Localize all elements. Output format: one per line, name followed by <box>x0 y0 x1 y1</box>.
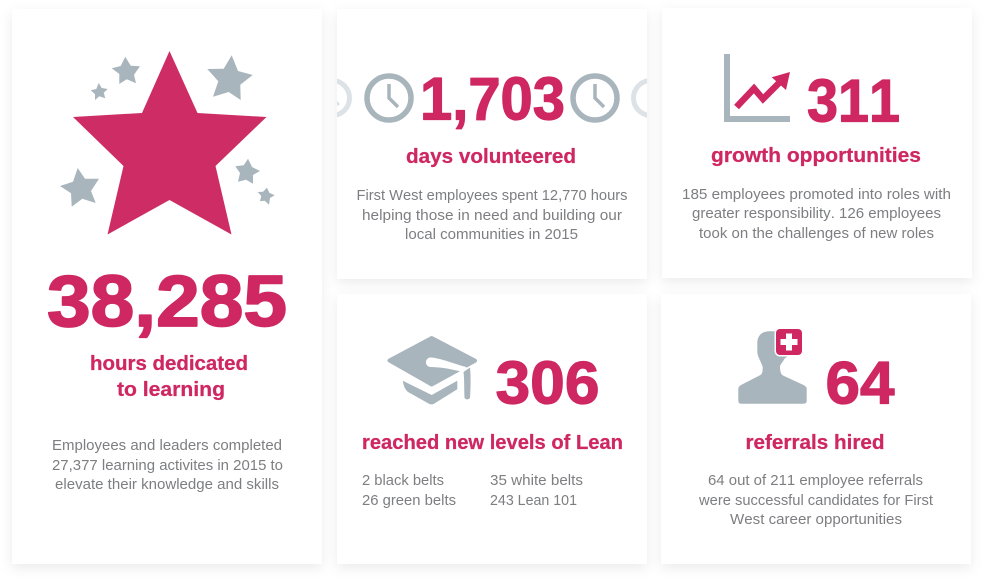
description: Employees and leaders completed <box>52 437 282 454</box>
panel: referrals hired <box>661 294 971 564</box>
big number: 38,285 <box>47 262 287 342</box>
description: elevate their knowledge and skills <box>55 476 279 493</box>
description: greater responsibility. 126 employees <box>692 205 941 222</box>
heading: growth opportunities <box>711 145 921 167</box>
description <box>682 186 951 242</box>
description: were successful candidates for First <box>698 492 934 509</box>
description <box>698 472 934 528</box>
description <box>356 187 628 243</box>
icon: graduation cap <box>390 338 475 404</box>
heading: referrals hired <box>746 432 884 454</box>
description <box>52 437 283 493</box>
big number: 64 <box>826 350 895 416</box>
description: 64 out of 211 employee referrals <box>708 472 923 489</box>
heading: to learning <box>117 379 225 401</box>
belt counts: 243 Lean 101 <box>490 492 577 509</box>
belt counts: 35 white belts <box>490 472 583 489</box>
description: helping those in need and building our <box>362 207 622 224</box>
heading <box>90 353 248 401</box>
belt counts: 26 green belts <box>362 492 456 509</box>
description: West career opportunities <box>730 511 902 528</box>
belt counts: 2 black belts <box>362 472 444 489</box>
heading: days volunteered <box>406 146 576 168</box>
description: 185 employees promoted into roles with <box>682 186 951 203</box>
description: 27,377 learning activites in 2015 to <box>52 457 283 474</box>
description: local communities in 2015 <box>405 226 578 243</box>
belt counts <box>362 472 583 509</box>
icon: row of clocks <box>314 76 668 120</box>
big number: 1,703 <box>420 66 565 132</box>
panel: days volunteered <box>336 20 648 284</box>
description: First West employees spent 12,770 hours <box>356 187 628 204</box>
icon: growth chart with arrow <box>724 54 790 122</box>
big number: 311 <box>807 68 900 134</box>
heading: hours dedicated <box>90 353 248 375</box>
description: took on the challenges of new roles <box>699 225 934 242</box>
panel: growth opportunities <box>662 8 972 278</box>
panel: hours dedicated to learning <box>12 9 322 564</box>
icon: large star with small stars <box>60 51 275 234</box>
heading: reached new levels of Lean <box>362 432 623 454</box>
big number: 306 <box>496 350 600 416</box>
panel: reached new levels of Lean <box>337 294 647 564</box>
icon: person with plus badge <box>738 329 807 404</box>
